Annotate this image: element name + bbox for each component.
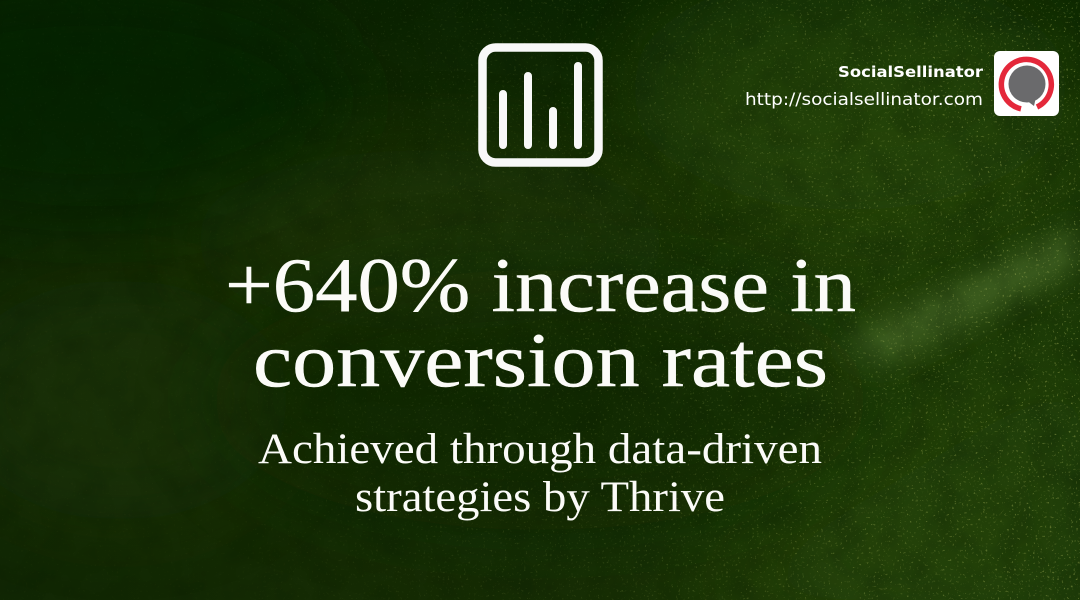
brand name: SocialSellinator <box>838 63 983 81</box>
subtitle <box>258 426 822 521</box>
title <box>225 242 856 403</box>
subtitle: Achieved through data-driven <box>258 426 822 473</box>
title: conversion rates <box>253 317 828 403</box>
logo: SocialSellinator badge <box>994 51 1059 116</box>
brand url: http://socialsellinator.com <box>745 90 983 109</box>
title: +640% increase in <box>225 242 856 328</box>
icon: bar chart in rounded square <box>482 48 598 162</box>
subtitle: strategies by Thrive <box>355 474 725 521</box>
